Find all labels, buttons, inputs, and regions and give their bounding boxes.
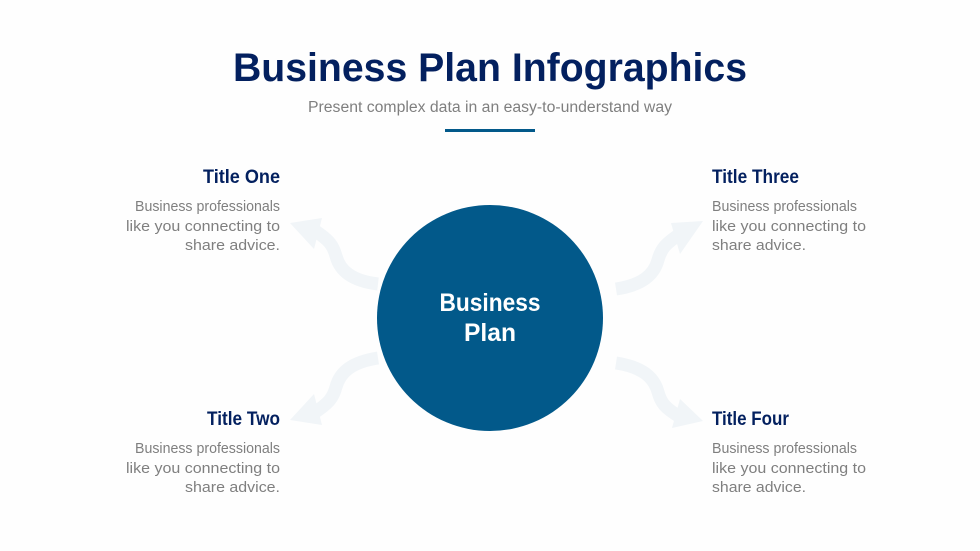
text block: Title Three: Title Three — [712, 167, 799, 188]
arrow: to Title One — [290, 218, 378, 284]
arrow: to Title Three — [616, 221, 703, 289]
text block: Title Three: Business professionals — [712, 198, 857, 215]
text block: Title One: like you connecting to — [126, 218, 280, 235]
text block: Title Four: like you connecting to — [712, 460, 866, 477]
text block: Title Two: like you connecting to — [126, 460, 280, 477]
text block: Title One — [126, 167, 280, 254]
title underline — [445, 129, 535, 132]
text block: Title Two: Business professionals — [135, 440, 280, 457]
text block: Title Four: Business professionals — [712, 440, 857, 457]
text block: Title One: Business professionals — [135, 198, 280, 215]
subtitle: Present complex data in an easy-to-understand way — [308, 99, 672, 116]
arrow: to Title Two — [290, 358, 378, 425]
text block: Title Two: share advice. — [185, 479, 280, 496]
text block: Title Two — [126, 409, 280, 496]
text block: Title Two: Title Two — [207, 409, 280, 430]
central circle: Business Plan: Plan — [464, 319, 516, 347]
text block: Title Four: share advice. — [712, 479, 806, 496]
text block: Title One: share advice. — [185, 237, 280, 254]
text block: Title Three: share advice. — [712, 237, 806, 254]
text block: Title Four — [712, 409, 866, 496]
arrow: to Title Four — [616, 363, 703, 428]
text block: Title One: Title One — [203, 167, 280, 188]
central circle: Business Plan — [377, 205, 603, 431]
central circle: Business Plan: Business — [440, 289, 540, 317]
text block: Title Three — [712, 167, 866, 254]
text block: Title Three: like you connecting to — [712, 218, 866, 235]
text block: Title Four: Title Four — [712, 409, 790, 430]
title: Business Plan Infographics — [233, 46, 747, 90]
